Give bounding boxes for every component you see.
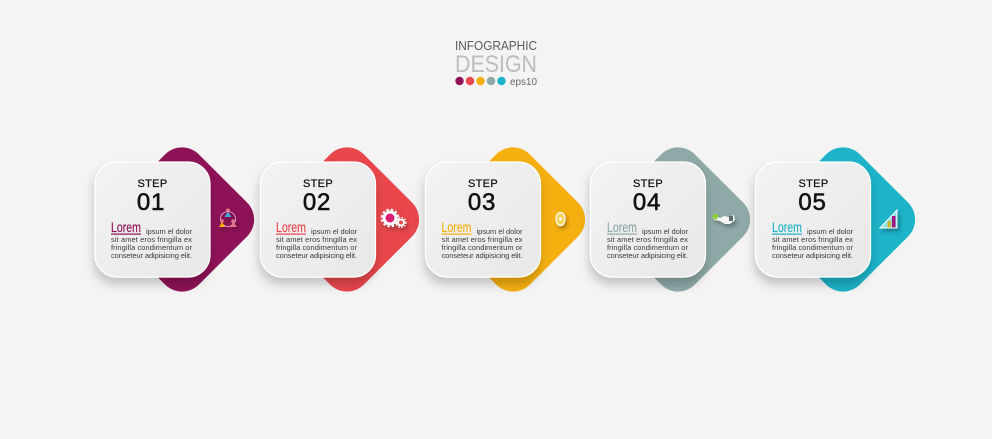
text block: ipsum el dolor [311,227,358,236]
step number: 01 [137,189,165,216]
title [455,39,537,88]
icon: handshake [712,213,735,224]
text block: Lorem [772,219,802,235]
icon: gears [382,210,406,228]
heading: infographic: INFOGRAPHIC [455,39,537,53]
text block [111,219,192,260]
diamond arrow [265,137,429,302]
step number: 02 [303,189,331,216]
text block: conseteur adipisicing elit. [111,251,192,260]
text block: Lorem [442,219,472,235]
panel: step 3 [426,137,595,302]
card [426,162,540,277]
text block: Lorem [111,219,141,235]
text block: sit amet eros fringilla ex [276,235,357,244]
panel: step 4 [590,137,760,302]
text block: Lorem [607,219,637,235]
text block: fringilla condimentum or [607,243,688,252]
card [95,162,210,277]
heading: design: DESIGN [455,51,537,78]
eps label: eps10 [510,76,537,88]
text block: sit amet eros fringilla ex [607,235,688,244]
diamond arrow [100,137,264,302]
icon: growth chart [880,210,897,228]
text block: ipsum el dolor [807,227,854,236]
diamond arrow [596,137,760,302]
step number: 03 [468,189,496,216]
text block: conseteur adipisicing elit. [442,251,522,260]
icon: team network [219,208,237,227]
text block: ipsum el dolor [476,227,523,236]
text block: ipsum el dolor [146,227,192,236]
panel: step 2 [260,137,429,302]
step label: STEP [303,178,333,190]
text block [607,219,688,260]
card [260,162,376,277]
step label: STEP [468,178,498,190]
step label: STEP [138,178,167,190]
text block [772,219,854,260]
diamond arrow [431,137,595,302]
text block: Lorem [276,219,306,235]
text block: fringilla condimentum or [442,243,523,252]
text block: conseteur adipisicing elit. [772,251,853,260]
text block: ipsum el dolor [642,227,688,236]
text block: conseteur adipisicing elit. [276,251,357,260]
text block: fringilla condimentum or [772,243,854,252]
text block: conseteur adipisicing elit. [607,251,688,260]
text block: fringilla condimentum or [276,243,358,252]
icon: target [556,212,565,226]
text block [276,219,358,260]
text block [442,219,523,260]
text block: fringilla condimentum or [111,243,192,252]
text block: sit amet eros fringilla ex [442,235,523,244]
card [756,162,870,277]
colour dots [455,77,506,85]
step label: STEP [799,178,828,190]
panel: step 5 [756,137,925,302]
diamond arrow [761,137,925,302]
text block: sit amet eros fringilla ex [772,235,853,244]
text block: sit amet eros fringilla ex [111,235,192,244]
step label: STEP [633,178,663,190]
panel: step 1 [95,137,264,302]
step number: 04 [633,189,661,216]
step number: 05 [798,189,827,216]
card [590,162,706,277]
